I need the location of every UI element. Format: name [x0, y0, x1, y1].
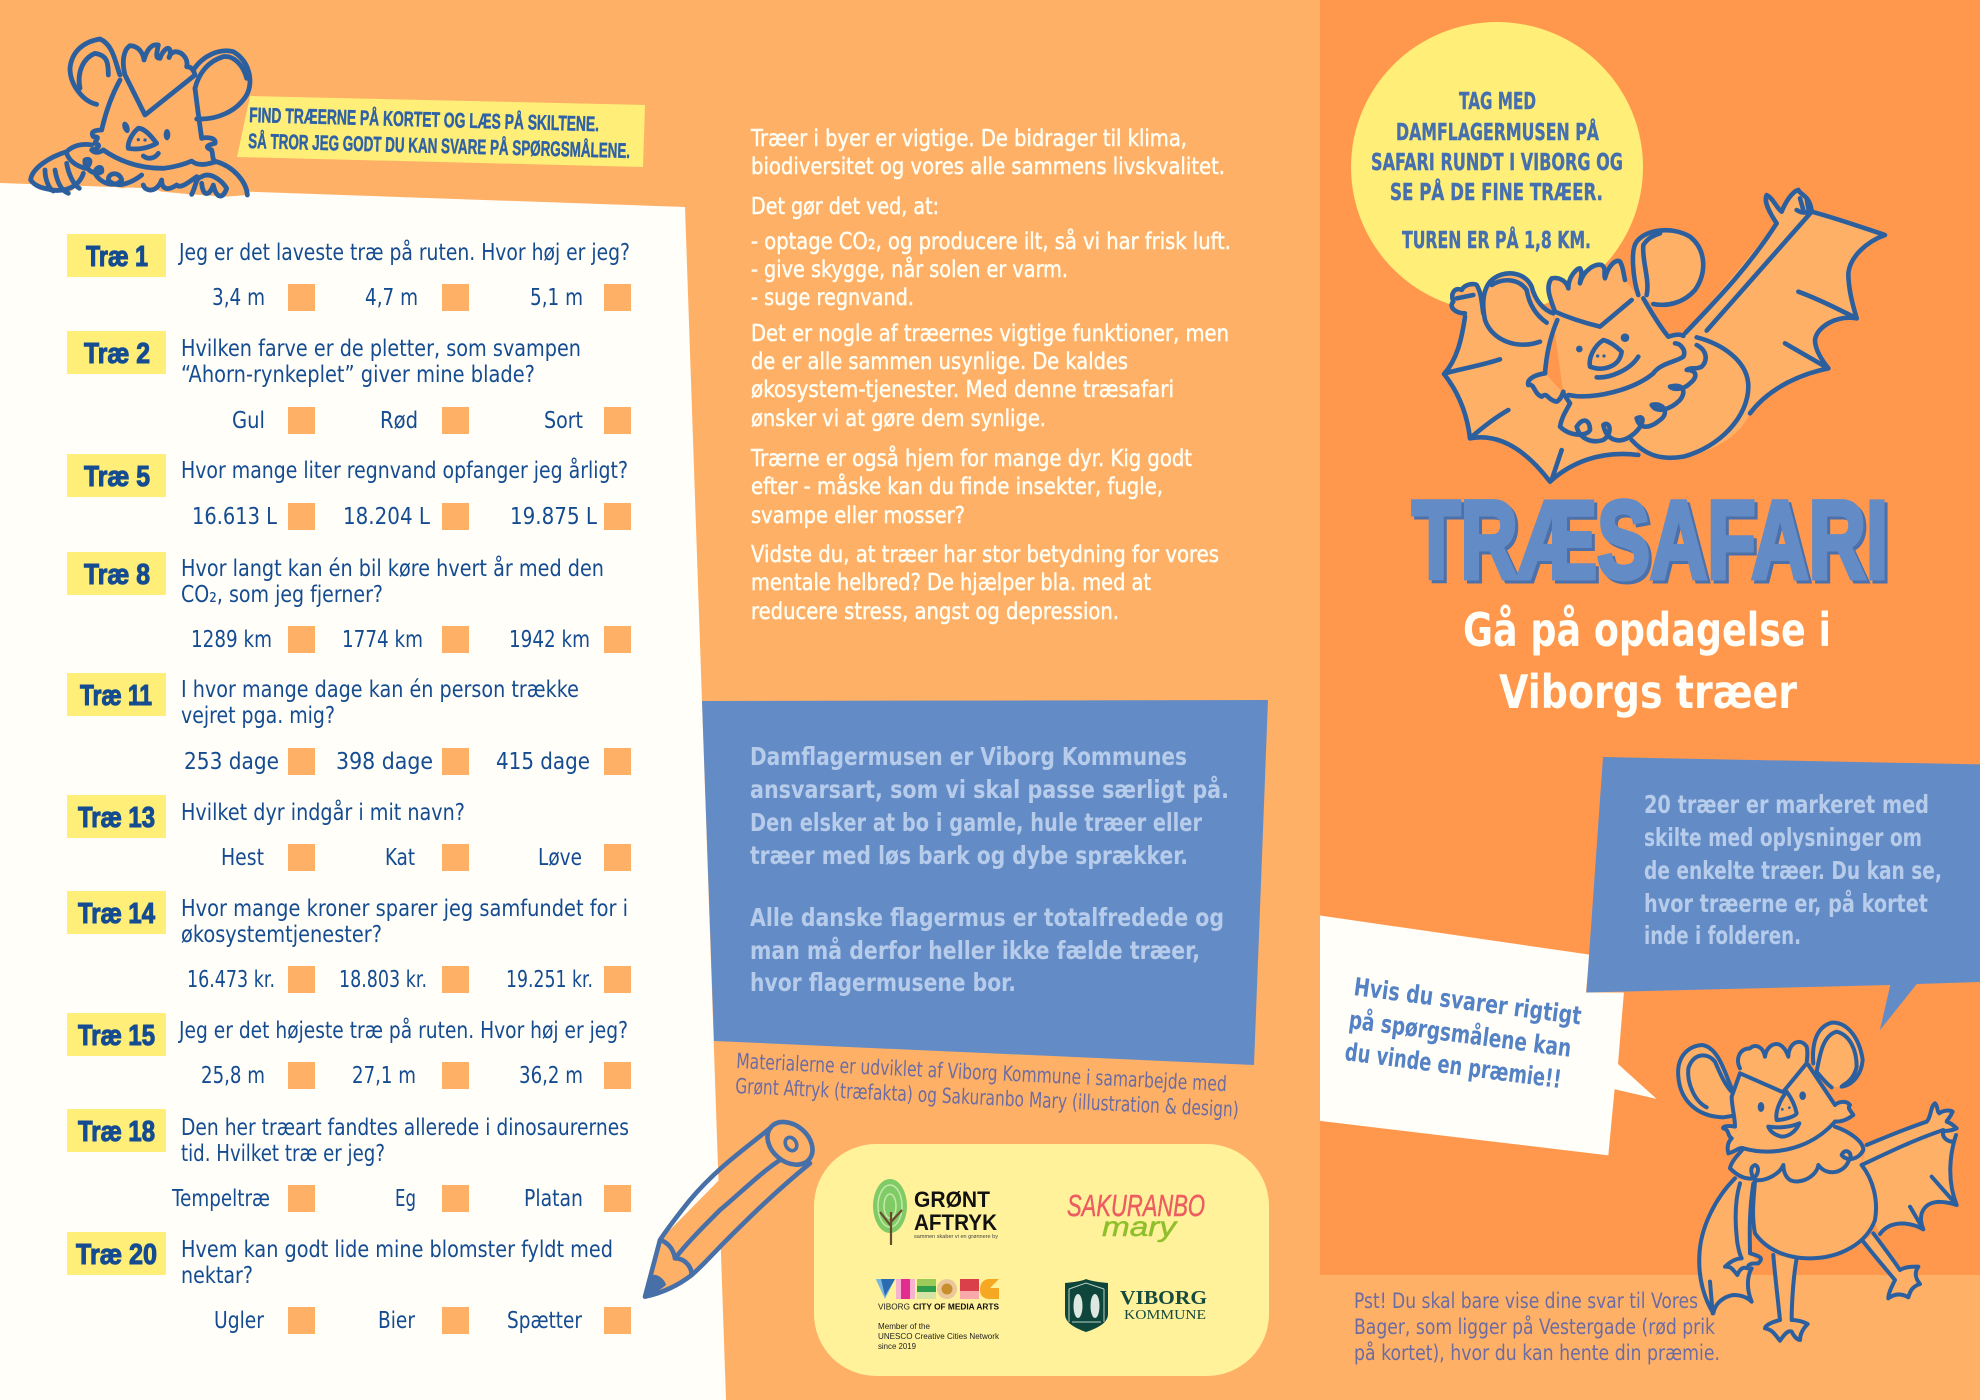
- quiz row: Træ 14: Hvor mange kroner sparer jeg samfundet for i: [181, 896, 628, 922]
- quiz row: Træ 8: Hvor langt kan én bil køre hvert år med den: [181, 554, 604, 582]
- quiz row: Træ 2: Gul: [232, 408, 265, 434]
- quiz row: Træ 5: 18.204 L: [343, 504, 430, 530]
- logo: Viborg City of Media Arts: VIBORG: [878, 1302, 910, 1312]
- quiz row: Træ 18: Tempeltræ: [171, 1186, 270, 1212]
- quiz row: Træ 2: “Ahorn-rynkeplet” giver mine blade?: [181, 362, 535, 388]
- quiz row: Træ 13: Kat: [385, 845, 415, 871]
- text block: prize pickup note: Bager, som ligger på Vestergade (rød prik: [1354, 1314, 1716, 1339]
- text block: why trees matter: mentale helbred? De hjælper bla. med at: [751, 568, 1151, 596]
- logo: Grønt Aftryk: sammen skaber vi en grønnere by: [914, 1234, 999, 1240]
- quiz row: Træ 11: 253 dage: [184, 749, 279, 775]
- logo: Viborg City of Media Arts: Member of the: [878, 1322, 931, 1331]
- quiz row: Træ 2: Sort: [544, 408, 583, 434]
- text block: why trees matter: økosystem-tjenester. Med denne træsafari: [751, 375, 1174, 403]
- quiz row: Træ 5: Træ 5: [84, 461, 150, 493]
- icon: pencil: [645, 1113, 821, 1297]
- quiz row: Træ 8: 1774 km: [342, 627, 423, 653]
- quiz row: Træ 14: 16.473 kr.: [187, 967, 275, 993]
- quiz row: Træ 1: [67, 234, 631, 311]
- quiz row: Træ 1: Træ 1: [86, 241, 148, 273]
- panel: bat species info: hvor flagermusene bor.: [750, 968, 1016, 997]
- logo: Viborg City of Media Arts: CITY OF MEDIA ARTS: [913, 1302, 1000, 1312]
- callout: signs speech bubble: [1586, 757, 1980, 1030]
- quiz row: Træ 20: [67, 1232, 631, 1334]
- text block: why trees matter: - give skygge, når solen er varm.: [751, 255, 1068, 283]
- quiz row: Træ 15: 25,8 m: [201, 1063, 265, 1089]
- panel: bat species info: træer med løs bark og dybe sprækker.: [750, 841, 1188, 870]
- panel: bat species info: Damflagermusen er Viborg Kommunes: [750, 742, 1187, 771]
- quiz row: Træ 1: Jeg er det laveste træ på ruten. Hvor høj er jeg?: [177, 238, 630, 266]
- quiz row: Træ 5: [67, 454, 631, 530]
- callout: prize speech bubble: du vinde en præmie!!: [1343, 1037, 1563, 1094]
- quiz row: Træ 8: [67, 552, 631, 653]
- text block: why trees matter: Vidste du, at træer har stor betydning for vores: [751, 540, 1219, 568]
- text block: why trees matter: efter - måske kan du finde insekter, fugle,: [751, 472, 1163, 500]
- quiz row: Træ 5: 16.613 L: [192, 504, 277, 530]
- panel: bat species info: Den elsker at bo i gamle, hule træer eller: [750, 808, 1203, 837]
- quiz row: Træ 5: 19.875 L: [510, 504, 597, 530]
- text block: why trees matter: de er alle sammen usynlige. De kaldes: [751, 347, 1128, 375]
- panel: bat species info: ansvarsart, som vi skal passe særligt på.: [750, 775, 1229, 804]
- quiz row: Træ 15: 27,1 m: [352, 1063, 416, 1089]
- panel: bat species info: Alle danske flagermus er totalfredede og: [750, 903, 1224, 932]
- illustration: standing bat: [1678, 1023, 1957, 1341]
- logo: Viborg City of Media Arts: [876, 1279, 1000, 1351]
- logo: Viborg City of Media Arts: UNESCO Creative Cities Network: [878, 1332, 1000, 1341]
- quiz row: Træ 1: 4,7 m: [365, 285, 418, 311]
- panel: bat species info: [702, 700, 1268, 1065]
- quiz row: Træ 8: 1942 km: [509, 627, 590, 653]
- quiz row: Træ 18: Den her træart fandtes allerede i dinosaurernes: [181, 1115, 629, 1141]
- logo: Grønt Aftryk: AFTRYK: [914, 1210, 997, 1235]
- callout: yellow intro circle: SAFARI RUNDT I VIBORG OG: [1371, 150, 1623, 176]
- text block: credits: Grønt Aftryk (træfakta) og Sakuranbo Mary (illustration & design): [735, 1074, 1239, 1122]
- logo: Grønt Aftryk: GRØNT: [914, 1187, 991, 1212]
- quiz row: Træ 20: Spætter: [507, 1308, 582, 1334]
- callout: find trees banner: [237, 96, 645, 167]
- quiz row: Træ 20: Hvem kan godt lide mine blomster fyldt med: [181, 1237, 613, 1263]
- callout: find trees banner: FIND TRÆERNE PÅ KORTET OG LÆS PÅ SKILTENE.: [249, 103, 599, 136]
- callout: yellow intro circle: DAMFLAGERMUSEN PÅ: [1396, 118, 1599, 146]
- quiz row: Træ 20: nektar?: [181, 1263, 253, 1289]
- quiz row: Træ 18: [67, 1109, 631, 1212]
- text block: why trees matter: Det gør det ved, at:: [751, 192, 939, 220]
- text block: credits: [735, 1049, 1239, 1122]
- heading: subtitle: Gå på opdagelse i: [1463, 603, 1831, 657]
- text block: prize pickup note: [1354, 1289, 1720, 1365]
- text block: why trees matter: - optage CO₂, og producere ilt, så vi har frisk luft.: [751, 227, 1231, 255]
- text block: why trees matter: Træer i byer er vigtige. De bidrager til klima,: [750, 124, 1187, 152]
- logo: Sakuranbo Mary: mary: [1102, 1211, 1178, 1242]
- panel: quiz sheet: [0, 183, 726, 1400]
- text block: why trees matter: [750, 124, 1231, 625]
- logo: Grønt Aftryk: [873, 1179, 999, 1245]
- quiz row: Træ 1: 5,1 m: [530, 285, 583, 311]
- text block: why trees matter: - suge regnvand.: [751, 283, 914, 311]
- quiz row: Træ 11: [67, 673, 631, 775]
- logo: Viborg Kommune: [1065, 1279, 1207, 1332]
- quiz row: Træ 18: Platan: [524, 1186, 583, 1212]
- text block: prize pickup note: på kortet), hvor du kan hente din præmie.: [1354, 1340, 1720, 1365]
- quiz row: Træ 11: 415 dage: [496, 749, 590, 775]
- text block: why trees matter: biodiversitet og vores alle sammens livskvalitet.: [751, 152, 1225, 180]
- quiz row: Træ 14: [67, 891, 631, 993]
- quiz row: Træ 15: 36,2 m: [519, 1063, 583, 1089]
- callout: yellow intro circle: SE PÅ DE FINE TRÆER.: [1390, 178, 1603, 206]
- quiz row: Træ 15: Jeg er det højeste træ på ruten. Hvor høj er jeg?: [177, 1016, 628, 1044]
- quiz row: Træ 14: 18.803 kr.: [339, 967, 427, 993]
- quiz row: Træ 18: tid. Hvilket træ er jeg?: [181, 1141, 385, 1167]
- quiz row: Træ 18: Eg: [395, 1186, 416, 1212]
- logo: Sakuranbo Mary: SAKURANBO: [1067, 1188, 1205, 1223]
- panel: bat species info: man må derfor heller ikke fælde træer,: [750, 936, 1200, 965]
- quiz row: Træ 20: Ugler: [214, 1308, 264, 1334]
- quiz row: Træ 15: [67, 1013, 631, 1089]
- text block: why trees matter: ønsker vi at gøre dem synlige.: [751, 404, 1046, 432]
- text block: why trees matter: Trærne er også hjem for mange dyr. Kig godt: [750, 444, 1192, 472]
- logo: Viborg City of Media Arts: since 2019: [878, 1342, 917, 1351]
- callout: signs speech bubble: inde i folderen.: [1644, 921, 1801, 950]
- panel: cover orange background: [1320, 0, 1980, 1275]
- quiz row: Træ 2: Hvilken farve er de pletter, som svampen: [181, 336, 581, 362]
- callout: yellow intro circle: [1351, 22, 1643, 312]
- quiz row: Træ 14: Træ 14: [78, 898, 155, 930]
- quiz row: Træ 14: økosystemtjenester?: [181, 922, 382, 948]
- quiz row: Træ 2: [67, 331, 631, 434]
- quiz row: Træ 2: Træ 2: [84, 338, 150, 370]
- text block: prize pickup note: Pst! Du skal bare vise dine svar til Vores: [1354, 1289, 1698, 1313]
- text block: why trees matter: svampe eller mosser?: [751, 501, 965, 529]
- quiz row: Træ 11: Træ 11: [80, 680, 152, 712]
- quiz row: Træ 8: 1289 km: [191, 627, 272, 653]
- callout: prize speech bubble: [1320, 916, 1657, 1155]
- text block: why trees matter: reducere stress, angst og depression.: [751, 597, 1119, 625]
- illustration: flying bat: [1444, 190, 1885, 482]
- text block: credits: Materialerne er udviklet af Viborg Kommune i samarbejde med: [736, 1049, 1227, 1096]
- quiz row: Træ 14: 19.251 kr.: [506, 967, 593, 993]
- heading: subtitle: Viborgs træer: [1499, 665, 1797, 719]
- quiz row: Træ 13: Løve: [538, 845, 582, 871]
- logo: Viborg Kommune: VIBORG: [1120, 1287, 1207, 1309]
- quiz row: Træ 20: Bier: [378, 1308, 415, 1334]
- quiz row: Træ 11: 398 dage: [336, 749, 433, 775]
- quiz row: Træ 20: Træ 20: [76, 1239, 157, 1271]
- quiz row: Træ 18: Træ 18: [78, 1116, 155, 1148]
- illustration: peeking bat: [31, 39, 250, 197]
- quiz row: Træ 11: I hvor mange dage kan én person trække: [181, 677, 579, 703]
- logo: Sakuranbo Mary: [1067, 1188, 1205, 1242]
- callout: find trees banner: SÅ TROR JEG GODT DU KAN SVARE PÅ SPØRGSMÅLENE.: [248, 129, 630, 163]
- quiz row: Træ 13: Hvilket dyr indgår i mit navn?: [181, 798, 465, 826]
- quiz row: Træ 13: Træ 13: [78, 802, 155, 834]
- quiz row: Træ 15: Træ 15: [78, 1020, 155, 1052]
- quiz row: Træ 13: Hest: [221, 845, 264, 871]
- quiz row: Træ 8: Træ 8: [84, 559, 150, 591]
- quiz row: Træ 2: Rød: [380, 408, 418, 434]
- quiz row: Træ 11: vejret pga. mig?: [181, 703, 335, 729]
- callout: yellow intro circle: TAG MED: [1459, 89, 1536, 115]
- quiz row: Træ 8: CO₂, som jeg fjerner?: [181, 582, 383, 608]
- heading: subtitle: [1463, 603, 1831, 719]
- panel: partner logos: [814, 1144, 1269, 1376]
- quiz row: Træ 13: [67, 795, 631, 871]
- quiz row: Træ 5: Hvor mange liter regnvand opfanger jeg årligt?: [181, 456, 628, 484]
- callout: prize speech bubble: på spørgsmålene kan: [1347, 1005, 1573, 1063]
- callout: prize speech bubble: Hvis du svarer rigtigt: [1352, 972, 1583, 1030]
- text block: why trees matter: Det er nogle af træernes vigtige funktioner, men: [751, 319, 1229, 347]
- callout: yellow intro circle: TUREN ER PÅ 1,8 KM.: [1402, 226, 1591, 254]
- quiz row: Træ 1: 3,4 m: [212, 285, 265, 311]
- logo: Viborg Kommune: KOMMUNE: [1124, 1308, 1206, 1323]
